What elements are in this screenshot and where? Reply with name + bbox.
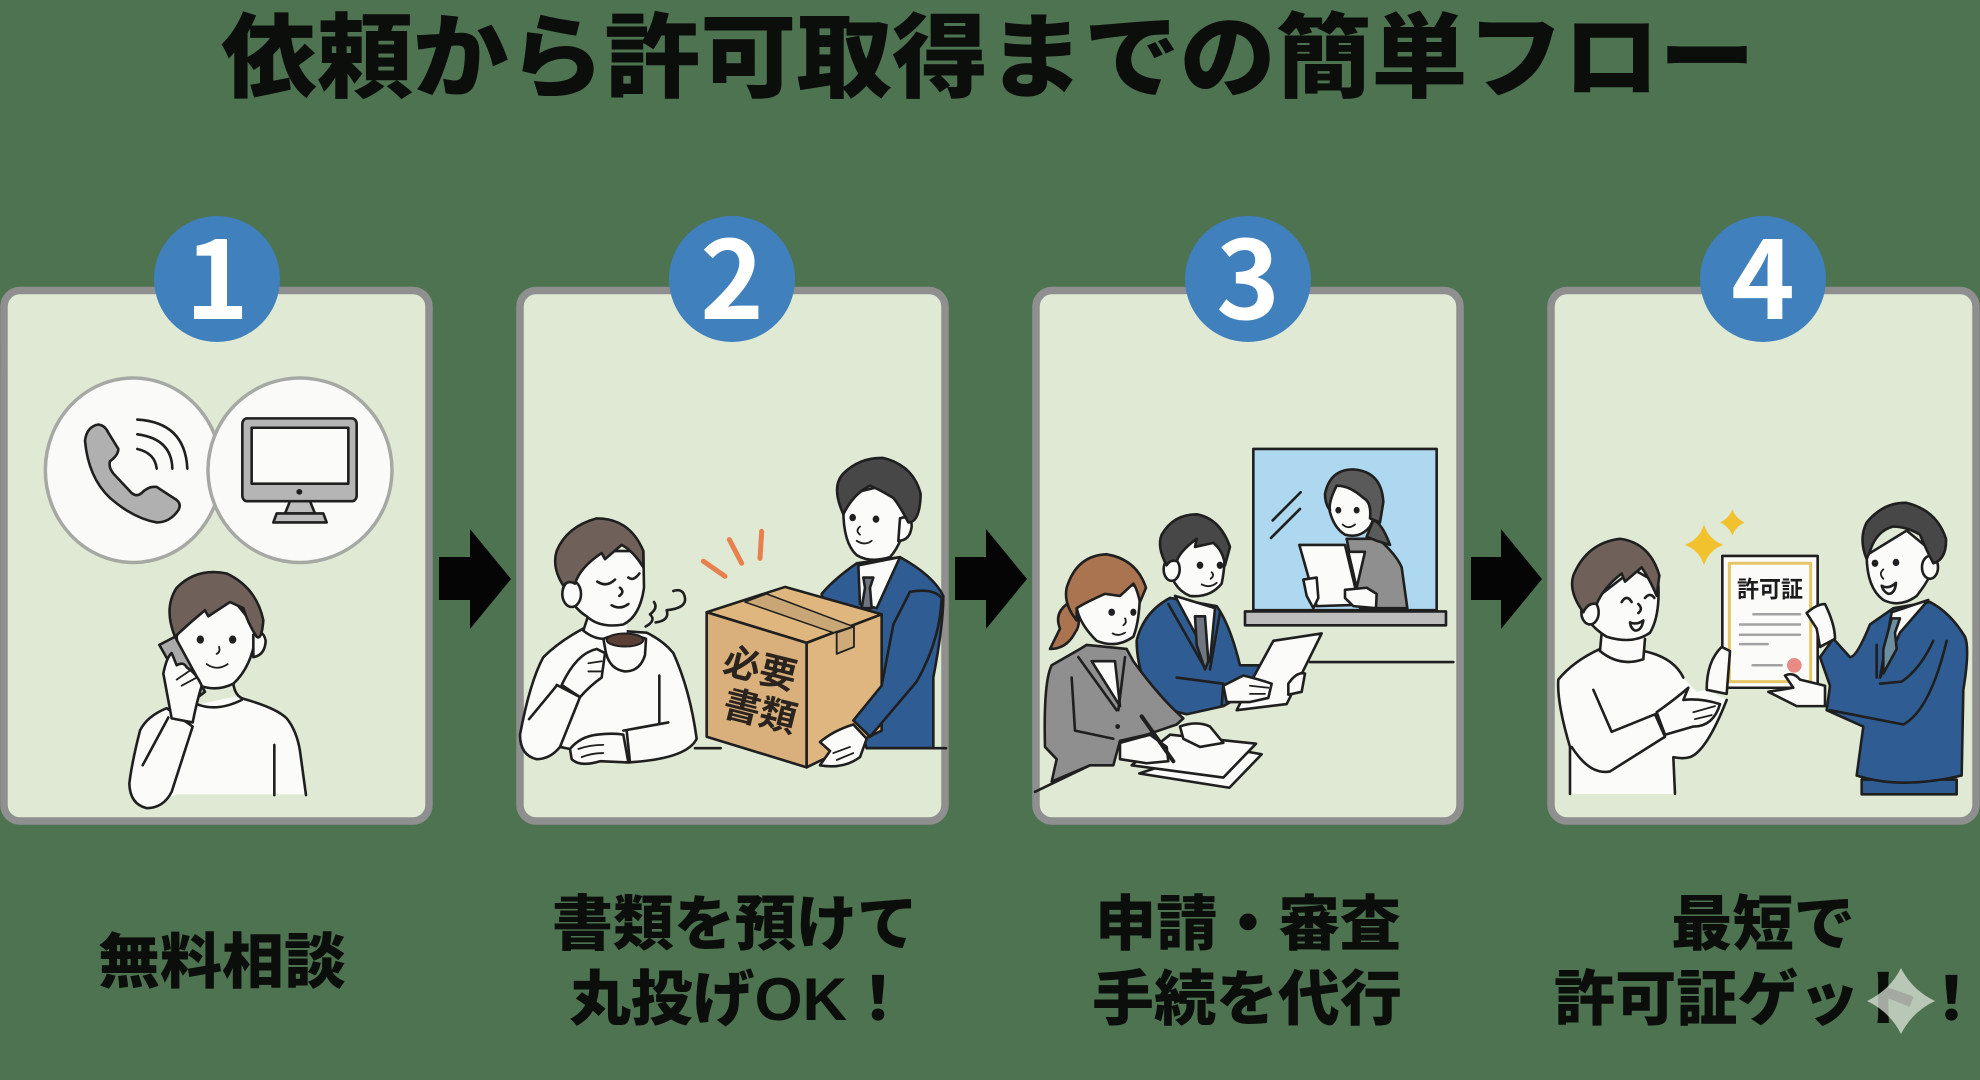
caption step 4: 許可証ゲット！ [1554,966,1980,1033]
smiling client [1558,539,1727,794]
box label: 書類 [719,683,801,741]
box label: 必要 [719,640,801,698]
arrow 2 to 3 [955,529,1027,629]
permit certificate [1722,556,1818,688]
staff man with paper [1137,514,1322,714]
staff woman writing [1035,554,1262,792]
caption step 3: 手続を代行 [1092,966,1402,1033]
panel: step 4 permit obtained [1551,290,1976,821]
counter window with clerk [1245,449,1446,625]
number badge 4: 4 [1731,195,1795,351]
seated client with coffee [520,518,721,764]
panel: step 1 free consultation [4,290,429,821]
caption step 2 [552,891,918,1033]
number badge 2: 2 [700,195,764,351]
staff in suit [1820,503,1967,794]
hands on certificate [1707,604,1835,706]
illustration: permit handover [1558,503,1967,794]
panel 2 frame [520,290,945,821]
staff member in suit [822,458,943,748]
number badge 1 [154,195,280,351]
caption step 4 [1554,891,1980,1033]
icon: monitor bubble [208,378,392,562]
number badge 3: 3 [1216,195,1280,351]
arrow 3 to 4 [1471,529,1542,629]
arrow 1 to 2 [439,529,511,629]
certificate label: 許可証 [1737,576,1803,602]
icon: phone bubble [45,378,221,562]
caption step 1: 無料相談 [98,929,346,996]
number badge 1: 1 [185,195,249,351]
number badge 4 [1700,195,1826,351]
icon: watermark sparkle [1867,968,1935,1034]
illustration: client with coffee and staff with box [520,458,946,767]
desk line [1310,661,1453,663]
sparkles [1685,509,1744,565]
panel 3 frame [1036,290,1460,821]
person on the phone [129,572,306,808]
box label [719,640,801,741]
caption step 3: 申請・審査 [1095,891,1401,958]
panel: step 2 hand over documents [520,290,946,821]
caption step 4: 最短で [1671,891,1855,958]
panel 4 frame [1551,290,1976,821]
title: 依頼から許可取得までの簡単フロー [221,8,1755,110]
caption step 2: 書類を預けて [552,891,918,958]
illustration: staff at government counter [1035,449,1453,792]
number badge 3 [1185,195,1311,351]
caption step 3 [1092,891,1402,1033]
staff arm and hand [820,591,946,766]
illustration: phone, monitor and caller [45,378,392,808]
number badge 2 [669,195,795,351]
cardboard box [707,587,882,767]
orange emphasis marks [703,531,762,576]
caption step 2: 丸投げOK！ [569,966,909,1033]
panel 1 frame [4,290,429,821]
panel: step 3 application and review [1035,290,1460,821]
